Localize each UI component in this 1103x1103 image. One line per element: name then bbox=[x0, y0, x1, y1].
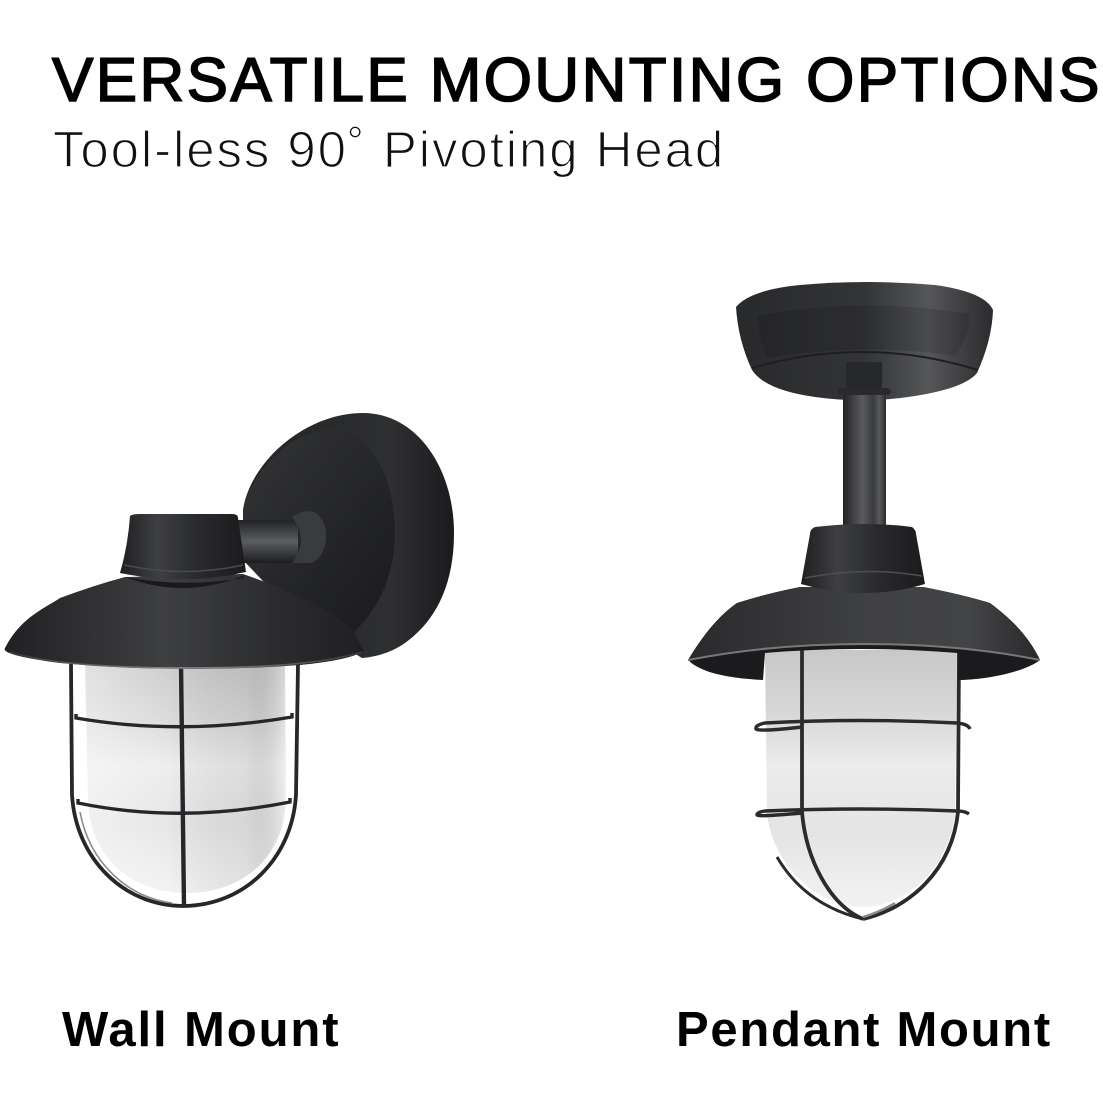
label: pendant mount: Pendant Mount bbox=[676, 1003, 1052, 1057]
wall plate bbox=[243, 413, 454, 658]
stem bbox=[838, 362, 891, 528]
title: VERSATILE MOUNTING OPTIONS bbox=[52, 46, 1102, 115]
ceiling canopy bbox=[736, 282, 993, 400]
cage bbox=[756, 650, 970, 919]
cap bbox=[801, 524, 925, 593]
subtitle: Tool-less 90˚ Pivoting Head bbox=[53, 121, 725, 178]
shade bbox=[688, 587, 1040, 680]
cap bbox=[120, 514, 246, 579]
icon: wall mount lamp bbox=[5, 413, 454, 906]
arm bbox=[232, 511, 326, 563]
glass globe bbox=[765, 650, 957, 907]
glass globe bbox=[85, 662, 286, 893]
cage bbox=[71, 664, 298, 906]
label: wall mount: Wall Mount bbox=[62, 1003, 340, 1057]
icon: pendant mount lamp bbox=[688, 282, 1040, 919]
shade bbox=[5, 574, 364, 669]
